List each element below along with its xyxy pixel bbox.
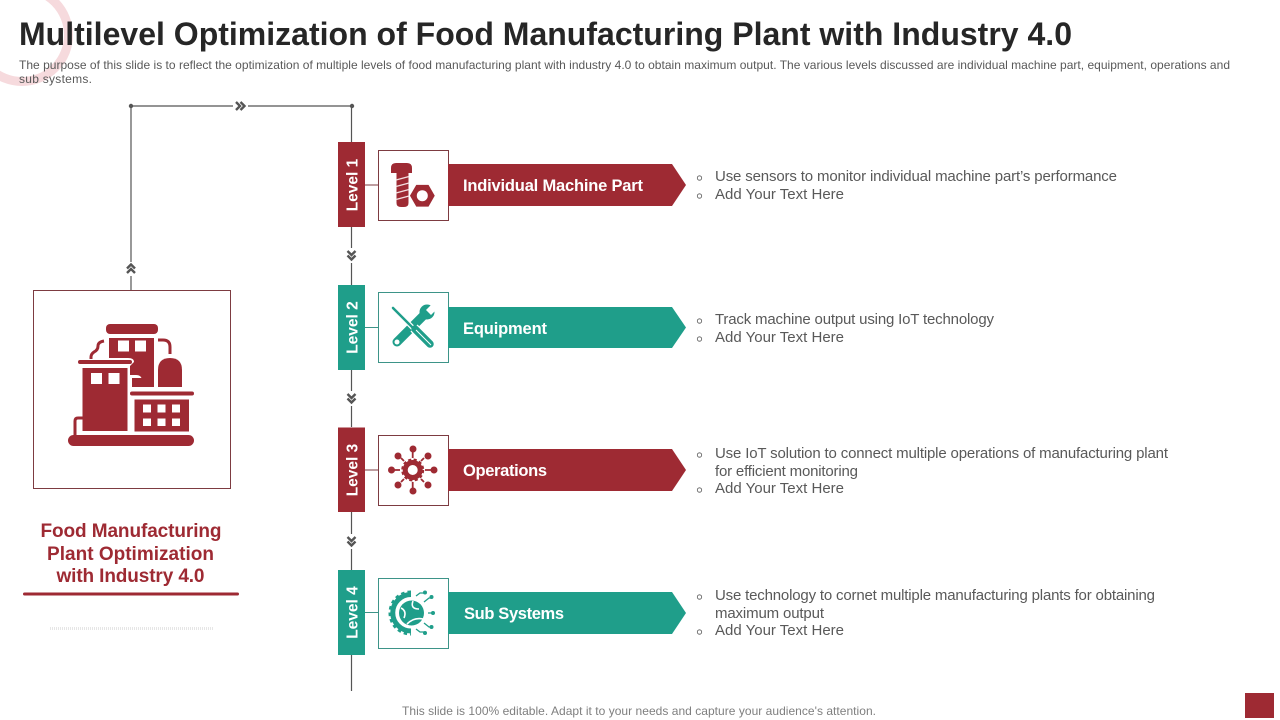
- subtitle text block: [19, 58, 1230, 86]
- level 2 tab: Level 2: [344, 301, 362, 354]
- bullet text: for efficient monitoring: [715, 463, 858, 480]
- banner: Individual Machine Part: [448, 164, 686, 206]
- bullet text: [697, 445, 1169, 497]
- icon: factory: [68, 324, 194, 446]
- bullet text: [697, 311, 994, 346]
- bullet text: Add Your Text Here: [715, 329, 844, 346]
- heading underline: [23, 592, 239, 596]
- subtitle text block: sub systems.: [19, 72, 92, 86]
- row: level 4: [338, 570, 1155, 655]
- icon box: crossed tools: [378, 292, 448, 362]
- icon box: globe gear: [378, 578, 448, 648]
- row: level 3: [338, 428, 1169, 512]
- left panel heading: with Industry 4.0: [56, 566, 204, 587]
- level 3 tab: Level 3: [344, 443, 362, 496]
- left panel heading: Food Manufacturing: [40, 521, 222, 542]
- icon box: bolt and nut: [378, 150, 448, 220]
- bullet text: Add Your Text Here: [715, 480, 844, 497]
- level 2 tab: [338, 285, 365, 370]
- icon box: gear network: [378, 436, 448, 506]
- subtitle text block: The purpose of this slide is to reflect the optimization of multiple levels of food manufacturing plant with industry 4.0 to obtain maximum output. The various levels discussed are individual machine part, equipment, operations and: [19, 58, 1230, 72]
- corner square: [1245, 693, 1274, 718]
- row: level 2: [338, 285, 994, 370]
- bullet text: Add Your Text Here: [715, 186, 844, 203]
- banner: Equipment: Equipment: [463, 320, 548, 338]
- level 1 tab: Level 1: [344, 158, 362, 211]
- screwdriver: [393, 308, 415, 330]
- footer note: This slide is 100% editable. Adapt it to your needs and capture your audience's attention.: [402, 704, 876, 718]
- banner: Sub Systems: Sub Systems: [464, 605, 564, 623]
- vertical timeline with chevrons: [348, 106, 356, 691]
- banner: Operations: Operations: [463, 462, 547, 480]
- level 4 tab: [338, 570, 365, 655]
- banner: Sub Systems: [448, 592, 686, 634]
- row: level 1: [338, 142, 1117, 227]
- title: Multilevel Optimization of Food Manufacturing Plant with Industry 4.0: [19, 16, 1072, 52]
- bullet text: Use IoT solution to connect multiple operations of manufacturing plant: [715, 445, 1169, 462]
- connector: top line from left panel to timeline: [127, 102, 354, 290]
- banner: Individual Machine Part: Individual Machine Part: [463, 177, 644, 195]
- bullet text: Use sensors to monitor individual machine part’s performance: [715, 168, 1117, 185]
- bullet text: Add Your Text Here: [715, 622, 844, 639]
- banner: Operations: [448, 449, 686, 491]
- bullet text: Use technology to cornet multiple manufacturing plants for obtaining: [715, 587, 1155, 604]
- bullet text: Track machine output using IoT technology: [715, 311, 994, 328]
- bullet text: [697, 587, 1155, 639]
- level 4 tab: Level 4: [344, 586, 362, 639]
- panel: factory icon box: [34, 290, 230, 488]
- level 3 tab: [338, 428, 365, 512]
- left panel heading: Plant Optimization: [47, 544, 214, 565]
- bullet text: maximum output: [715, 605, 825, 622]
- bullet text: [697, 168, 1117, 203]
- banner: Equipment: [448, 307, 686, 348]
- level 1 tab: [338, 142, 365, 227]
- wrench: [397, 315, 424, 342]
- left panel heading: [40, 521, 222, 587]
